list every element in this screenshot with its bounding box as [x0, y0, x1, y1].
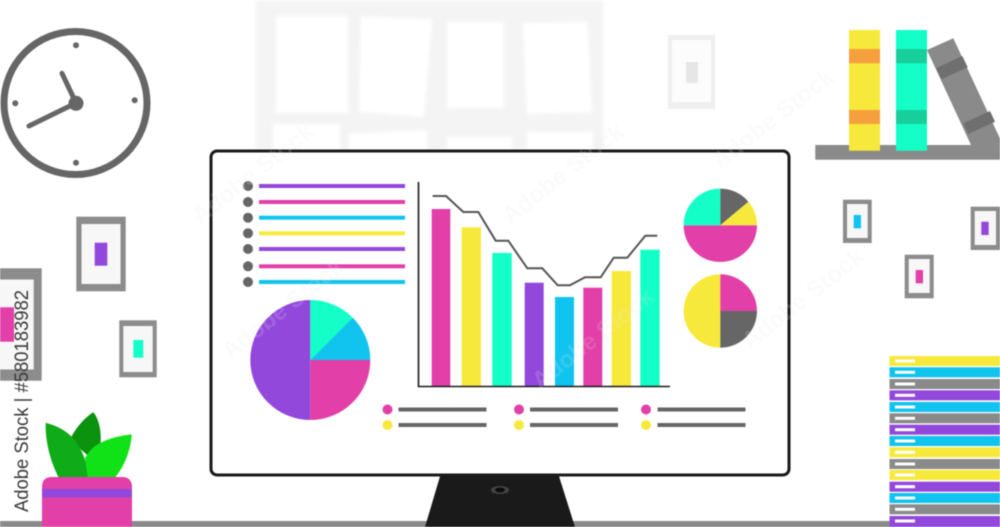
stock watermark, faint diagonal: Adobe Stock [497, 118, 630, 230]
small pie chart: bottom [684, 274, 757, 348]
wall frame: blue [843, 200, 872, 243]
stock watermark, faint diagonal: Adobe Stock [707, 63, 840, 175]
shelf with books [815, 30, 1000, 160]
stock watermark, faint diagonal [187, 63, 870, 395]
bullet list [243, 181, 405, 287]
faded wall frame [668, 35, 715, 109]
stock watermark, faint diagonal: Adobe Stock [217, 253, 350, 365]
bar chart with trend line [418, 182, 670, 386]
monitor screen [211, 151, 789, 475]
wall frame: magenta, cropped at the left edge [0, 268, 42, 381]
floor [0, 521, 1000, 527]
stock watermark, faint diagonal: Adobe Stock [527, 283, 660, 395]
vertical stock id label: Adobe Stock | #580183982 [12, 290, 33, 512]
monitor stand [425, 474, 575, 527]
wall frame: purple small [971, 207, 1000, 250]
legend [382, 404, 746, 430]
faded window [256, 0, 603, 152]
stock watermark, faint diagonal: Adobe Stock [187, 118, 320, 230]
wall frame: magenta small [905, 255, 934, 298]
wall frame: mint [119, 320, 157, 377]
wall clock [4, 32, 147, 174]
wall frame: purple [76, 217, 126, 291]
book stack [890, 356, 1000, 527]
stock watermark, faint diagonal: Adobe Stock [737, 243, 870, 355]
large pie chart [250, 300, 370, 420]
potted plant [42, 412, 132, 527]
small pie chart: top [684, 189, 757, 262]
